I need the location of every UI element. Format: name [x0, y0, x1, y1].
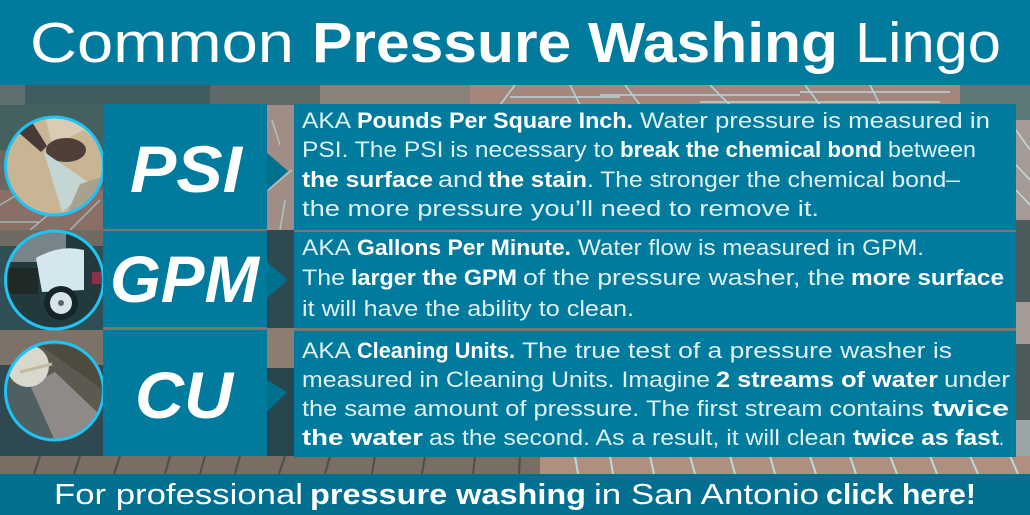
text panel: CU definition: as the second. As a result, it will clean: [429, 425, 846, 450]
text panel: PSI definition: [294, 104, 1016, 230]
label panel: PSI: [103, 104, 288, 229]
photo circle: nozzle spraying: [4, 116, 106, 216]
text panel: CU definition: under: [944, 367, 1010, 392]
text panel: CU definition: AKA: [302, 338, 351, 363]
label panel: PSI: PSI: [130, 132, 244, 206]
text panel: PSI definition: the surface: [302, 167, 433, 192]
text panel: PSI definition: break the chemical bond: [620, 137, 882, 162]
text panel: CU definition: [294, 331, 1016, 457]
text panel: PSI definition: Water pressure is measured in: [640, 108, 990, 133]
text panel: CU definition: the water: [302, 425, 424, 450]
photo circle: surface cleaner: [4, 341, 106, 441]
footer call to action: in San Antonio: [594, 479, 819, 511]
text panel: GPM definition: Water flow is measured in GPM.: [578, 235, 924, 260]
background photo: brick driveway: [0, 85, 1030, 474]
text panel: PSI definition: Pounds Per Square Inch.: [357, 108, 633, 133]
text panel: PSI definition: . The stronger the chemical bond–: [587, 167, 961, 192]
label panel: GPM: [103, 231, 288, 327]
text panel: CU definition: Cleaning Units.: [357, 338, 515, 363]
title: [30, 11, 1001, 75]
text panel: PSI definition: PSI. The PSI is necessary to: [302, 137, 614, 162]
title: Pressure Washing: [312, 11, 838, 75]
text panel: CU definition: The true test of a pressure washer is: [522, 338, 952, 363]
text panel: GPM definition: The: [302, 265, 345, 290]
footer call to action: [54, 479, 976, 511]
title: Common: [30, 11, 294, 75]
text panel: GPM definition: AKA: [302, 235, 351, 260]
text panel: GPM definition: [294, 232, 1016, 328]
text panel: GPM definition: larger the GPM: [351, 265, 517, 290]
text panel: PSI definition: the more pressure you’ll need to remove it.: [302, 196, 819, 221]
text panel: GPM definition: Gallons Per Minute.: [357, 235, 571, 260]
text panel: PSI definition: AKA: [302, 108, 351, 133]
photo circle: trailer pressure washer: [4, 230, 106, 330]
footer call to action: For professional: [54, 479, 303, 511]
text panel: PSI definition: and: [438, 167, 483, 192]
footer call to action: pressure washing: [310, 479, 586, 511]
label panel: CU: CU: [135, 358, 235, 432]
title: Lingo: [855, 11, 1001, 75]
text panel: PSI definition: between: [888, 137, 976, 162]
text panel: CU definition: .: [999, 425, 1004, 450]
label panel: GPM: GPM: [110, 242, 261, 316]
text panel: CU definition: measured in Cleaning Units. Imagine: [302, 367, 710, 392]
footer call to action: click here!: [826, 479, 976, 511]
text panel: GPM definition: of the pressure washer, the: [523, 265, 845, 290]
label panel: CU: [103, 330, 287, 456]
text panel: CU definition: 2 streams of water: [716, 367, 938, 392]
footer band: [0, 474, 1030, 515]
text panel: CU definition: twice: [932, 396, 1009, 421]
text panel: CU definition: the same amount of pressure. The first stream contains: [302, 396, 924, 421]
text panel: PSI definition: the stain: [488, 167, 587, 192]
text panel: CU definition: twice as fast: [853, 425, 1000, 450]
header band: [0, 0, 1030, 85]
text panel: GPM definition: it will have the ability to clean.: [302, 296, 634, 321]
text panel: GPM definition: more surface: [851, 265, 1004, 290]
